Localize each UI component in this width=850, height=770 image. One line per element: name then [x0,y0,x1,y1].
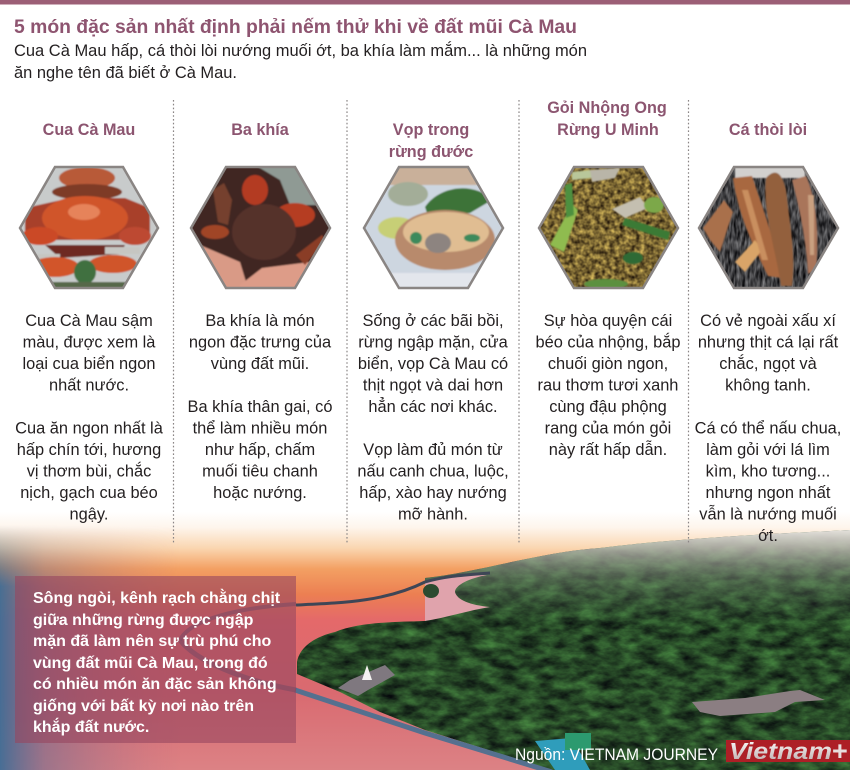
island [295,620,427,732]
description: vẫn là nướng muối [699,504,837,524]
logo: Vietnam+ [726,736,850,766]
panel: Cá thòi lòi [695,121,841,545]
description: muối tiêu chanh [202,462,318,480]
callout: Sông ngòi, kênh rạch chằng chịt [33,588,281,607]
panel: Cua Cà Mau [15,121,165,524]
description: chuối giòn ngon, [548,355,668,373]
intro text [14,41,587,82]
forest mainland [425,525,850,770]
description: hấp, xào hay nướng [359,484,507,502]
logo: Vietnam+: Vietnam [729,738,832,764]
description: này rất hấp dẫn. [549,440,667,459]
description: nấu canh chua, luộc, [357,462,509,480]
title: 5 món đặc sản nhất định phải nếm thử khi về đất mũi Cà Mau [14,17,577,38]
description: béo của nhộng, bắp [536,332,680,352]
description: biển, vọp Cà Mau có [358,355,508,373]
description: thể làm nhiều món [193,420,327,438]
description: Ba khía thân gai, có [188,398,332,416]
callout [15,576,296,743]
road and bridge [296,573,490,605]
description [188,312,332,502]
river channel [425,575,490,621]
description: nịch, gạch cua béo [20,484,158,502]
description: rau thơm tươi xanh [538,376,678,394]
heading: Rừng U Minh [557,121,659,139]
description: hoặc nướng. [213,484,307,502]
heading: Ba khía [231,121,290,139]
panel: Ba khía [185,121,335,502]
description: rang của món gỏi [545,420,671,438]
description: ngậy. [70,506,108,524]
panel: Gỏi Nhộng Ong Rừng U Minh [536,99,680,459]
intro text: ăn nghe tên đã biết ở Cà Mau. [14,64,237,82]
callout: vùng đất mũi Cà Mau, trong đó [33,655,268,672]
photo: bee larvae salad in hexagon [539,167,678,289]
description: Cua ăn ngon nhất là [15,420,164,438]
description: kìm, kho tương... [706,462,830,480]
callout: có nhiều món ăn đặc sản không [33,676,277,693]
description: vùng đất mũi. [211,355,309,373]
source: Nguồn: VIETNAM JOURNEY [515,746,718,764]
description: làm gỏi với lá lìm [706,441,830,459]
description: Sự hòa quyện cái [544,312,672,330]
heading: Vọp trong [393,121,469,139]
logo: Vietnam+: + [832,736,848,766]
description [536,312,680,459]
photo: ba khia in hexagon [190,166,332,290]
description: nhất nước. [49,376,129,394]
description: không tanh. [725,376,811,394]
description [357,312,509,524]
description: thịt ngọt và dai hơn [363,376,503,394]
description: Ba khía là món [205,312,315,330]
description: Vọp làm đủ món từ [363,441,503,459]
panel: Vọp trong rừng đước [357,121,510,524]
background photo: mangrove forest at sunset [0,512,850,770]
heading: Gỏi Nhộng Ong [547,99,667,117]
description: nhưng ngon nhất [706,484,831,502]
description: màu, được xem là [23,334,156,352]
photo: grilled fish in hexagon [699,167,838,288]
description: Cua Cà Mau sậm [25,312,153,330]
heading: Cua Cà Mau [43,121,135,139]
description: Sống ở các bãi bồi, [362,312,504,330]
callout: giữa những rừng được ngập [33,612,254,629]
description: mỡ hành. [398,506,468,524]
heading [547,99,667,139]
description: cùng đậu phộng [549,398,667,416]
photo: clam dish in hexagon [362,166,504,290]
description: nhưng thịt cá lại rất [698,334,839,352]
callout: mặn đã làm nên sự trù phú cho [33,633,272,650]
description: loại cua biển ngon [22,355,156,373]
description: hẳn các nơi khác. [368,397,498,416]
description: rừng ngập mặn, cửa [358,334,509,352]
description: ớt. [758,527,778,545]
top bar [0,0,850,4]
description: vị thơm bùi, chắc [27,462,151,480]
heading: Cá thòi lòi [729,121,807,139]
callout: khắp đất nước. [33,717,149,736]
heading [389,121,473,161]
description: Cá có thể nấu chua, [695,420,841,438]
intro text: Cua Cà Mau hấp, cá thòi lòi nướng muối ớt, ba khía làm mắm... là những món [14,41,587,60]
description: Có vẻ ngoài xấu xí [700,312,836,330]
description [695,312,841,545]
description [15,312,164,524]
description: ngon đặc trưng của [189,334,332,352]
description: chắc, ngọt và [719,354,818,373]
description: hấp chín tới, hương [17,441,161,459]
callout: giống với bất kỳ nơi nào trên [33,698,254,715]
photo: crabs in hexagon [18,166,160,290]
heading: rừng đước [389,143,473,161]
description: như hấp, chấm [205,441,315,459]
